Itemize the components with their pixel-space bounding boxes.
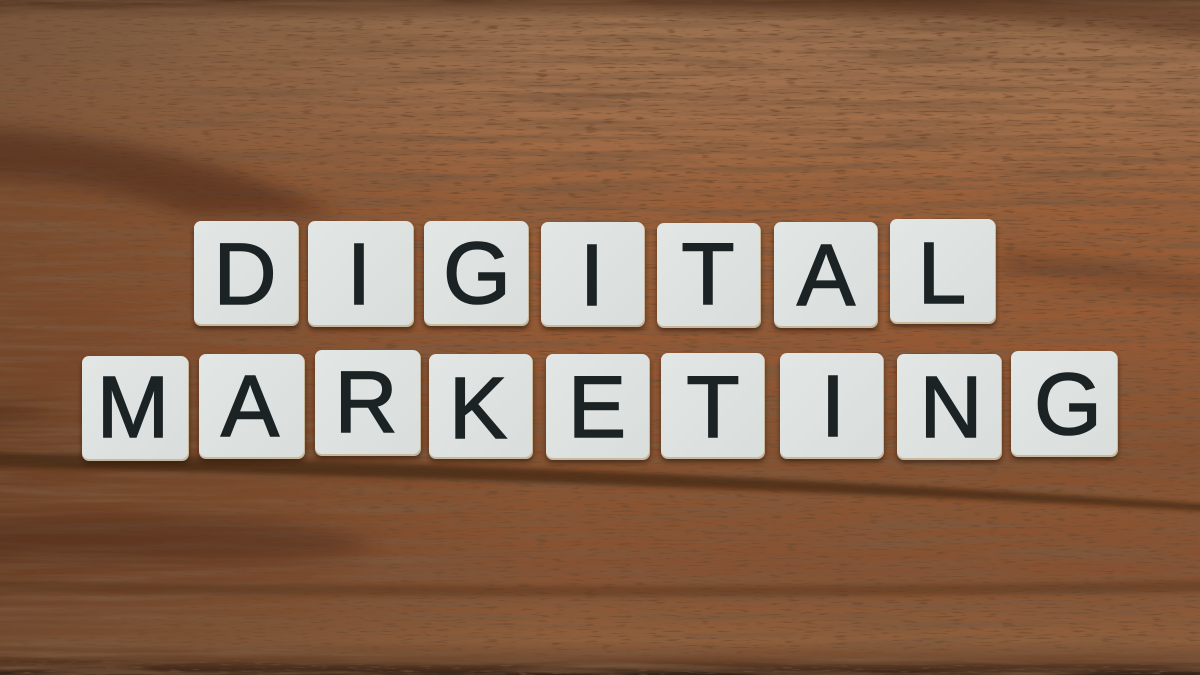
tile: G [424, 221, 529, 329]
tile: G [1011, 351, 1118, 460]
tile: T [661, 353, 765, 462]
tile: L [890, 219, 996, 327]
tile: N [897, 354, 1002, 463]
tile: D: D [214, 226, 276, 323]
tile: A: A [221, 358, 279, 455]
tile: I: I [347, 226, 371, 323]
tile: I: I [580, 227, 604, 324]
tile: A: A [797, 227, 855, 324]
tile: E: E [568, 359, 626, 456]
tile: A [774, 222, 878, 331]
tile: I [541, 222, 645, 330]
tile: R: R [335, 354, 397, 451]
tile: I [780, 353, 884, 462]
tile: K: K [449, 360, 507, 457]
tile: G: G [1034, 356, 1102, 453]
word: MARKETING [82, 350, 1118, 464]
tile: I: I [821, 358, 845, 455]
tile: M: M [97, 359, 169, 456]
word: DIGITAL [194, 219, 996, 331]
tile: G: G [443, 225, 511, 322]
tile: E [546, 354, 650, 463]
tile: L: L [918, 225, 966, 322]
tile: T: T [686, 359, 740, 456]
tile: D [194, 221, 299, 329]
tile: R [315, 350, 421, 459]
tile: T: T [681, 226, 735, 323]
tile: N: N [920, 359, 982, 456]
tile: A [199, 354, 305, 462]
tile: K [429, 354, 533, 462]
tile: I [308, 221, 414, 330]
tile: T [657, 223, 761, 331]
tile: M [82, 356, 189, 464]
